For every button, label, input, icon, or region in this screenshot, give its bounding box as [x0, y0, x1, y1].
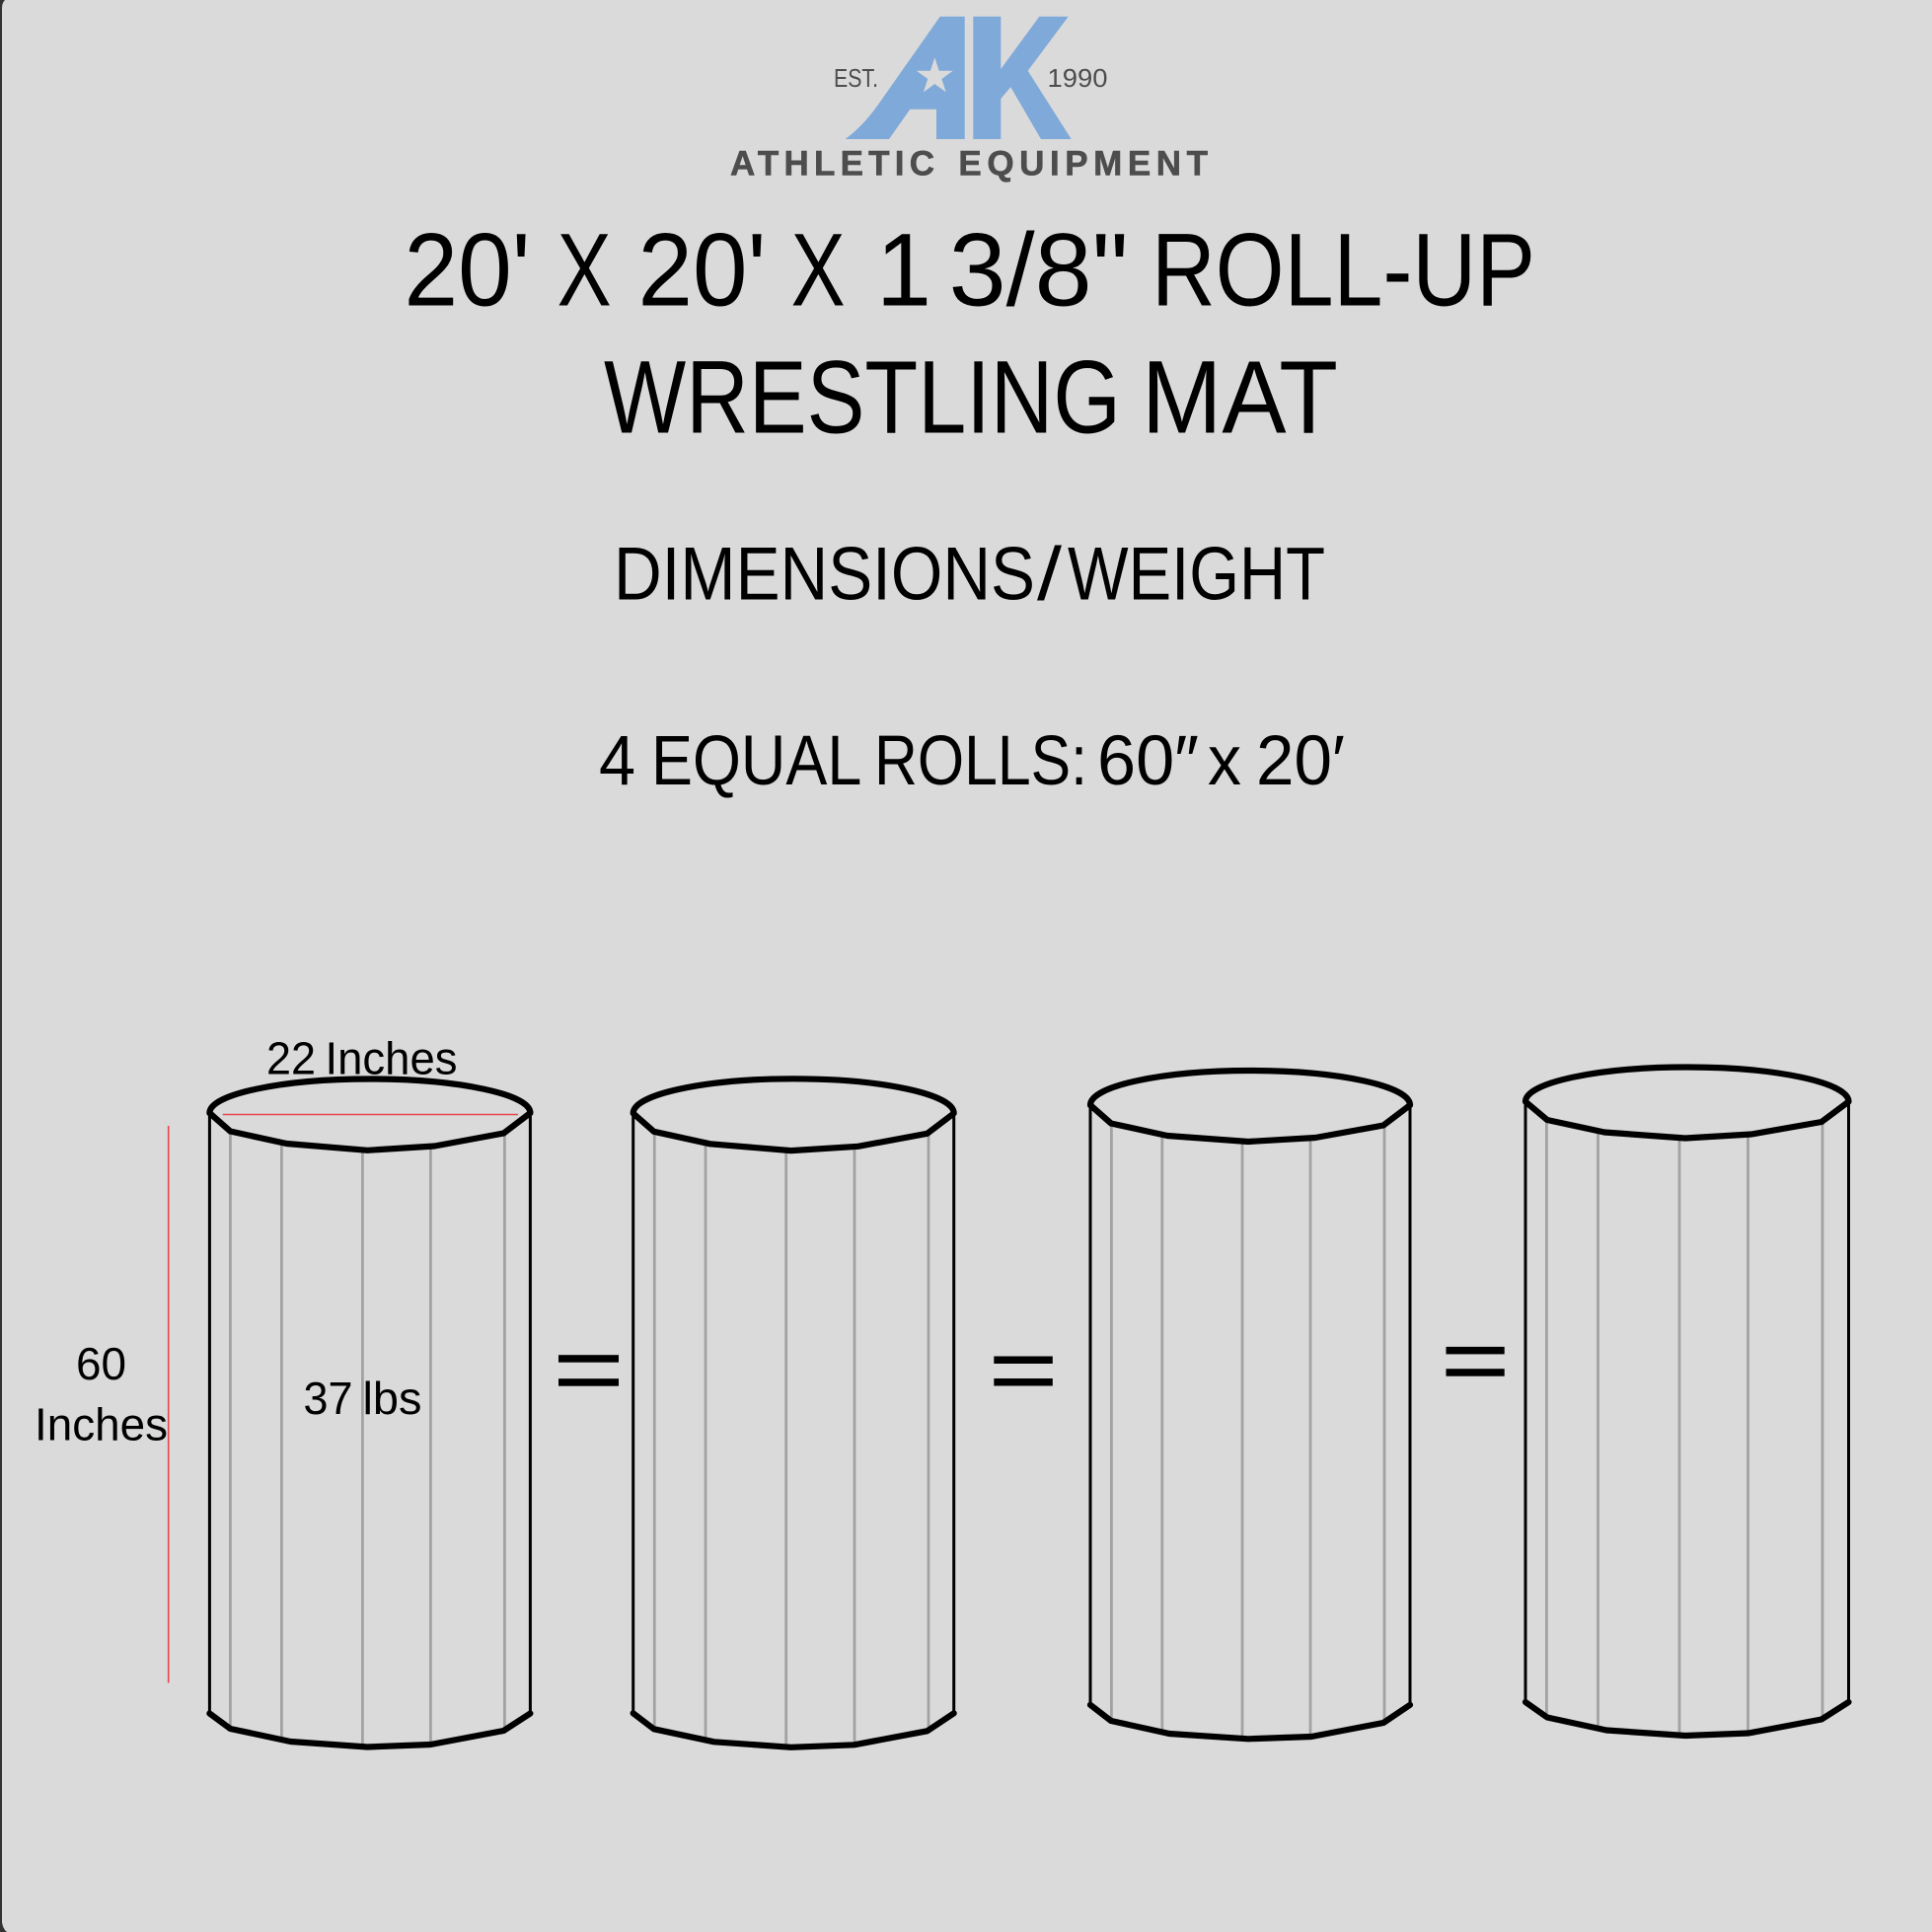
label: 60 inches: [35, 1338, 168, 1450]
roll 2 cylinder: [633, 1078, 954, 1747]
height dimension line: [168, 1126, 170, 1683]
logo wordmark: EQUIPMENT: [958, 144, 1208, 184]
roll 4 cylinder: [1525, 1068, 1849, 1736]
title line 2: MAT: [1142, 340, 1338, 456]
label: 22 inches: Inches: [326, 1032, 458, 1083]
title line 1: 1: [876, 213, 931, 328]
title line 2: WRESTLING: [604, 340, 1121, 456]
title line 1: X: [791, 213, 846, 328]
subheading: roll count: 4: [599, 721, 635, 800]
logo letter K: [973, 17, 1072, 139]
subheading: roll count: x: [1208, 721, 1241, 800]
title line 1: 3/8": [949, 213, 1129, 328]
logo letter A: [846, 17, 965, 139]
label: 37 lbs: 37: [304, 1373, 353, 1424]
roll 1 cylinder: [209, 1079, 530, 1746]
logo text: est: EST.: [834, 63, 878, 93]
logo text: 1990: 1990: [1048, 63, 1107, 93]
subheading: dimensions/weight: DIMENSIONS: [614, 533, 1035, 616]
equals sign 1: [558, 1355, 619, 1386]
logo: AK Athletic Equipment: [730, 17, 1208, 184]
title line 1: X: [557, 213, 612, 328]
label: 37 lbs: lbs: [363, 1373, 422, 1424]
label: 60 inches: Inches: [35, 1399, 168, 1450]
title: [405, 213, 1535, 456]
label: 22 inches: 22: [266, 1032, 316, 1083]
subheading: roll count: ROLLS:: [874, 721, 1087, 800]
label: 60 inches: 60: [76, 1338, 126, 1389]
equals sign 2: [994, 1356, 1053, 1385]
subheading: roll count: 20′: [1256, 721, 1345, 800]
subheading: dimensions/weight: /: [1037, 533, 1063, 616]
subheading: dimensions/weight: WEIGHT: [1068, 533, 1325, 616]
subheading: roll count: EQUAL: [651, 721, 860, 800]
title line 1: ROLL-UP: [1152, 213, 1535, 328]
title line 1: 20': [405, 213, 531, 328]
logo wordmark: ATHLETIC: [730, 144, 934, 184]
width dimension line: [223, 1113, 518, 1115]
roll 3 cylinder: [1090, 1071, 1410, 1739]
equals sign 3: [1447, 1347, 1505, 1376]
title line 1: 20': [637, 213, 766, 328]
logo star: [917, 57, 953, 92]
subheading: roll count: 60″: [1097, 721, 1199, 800]
